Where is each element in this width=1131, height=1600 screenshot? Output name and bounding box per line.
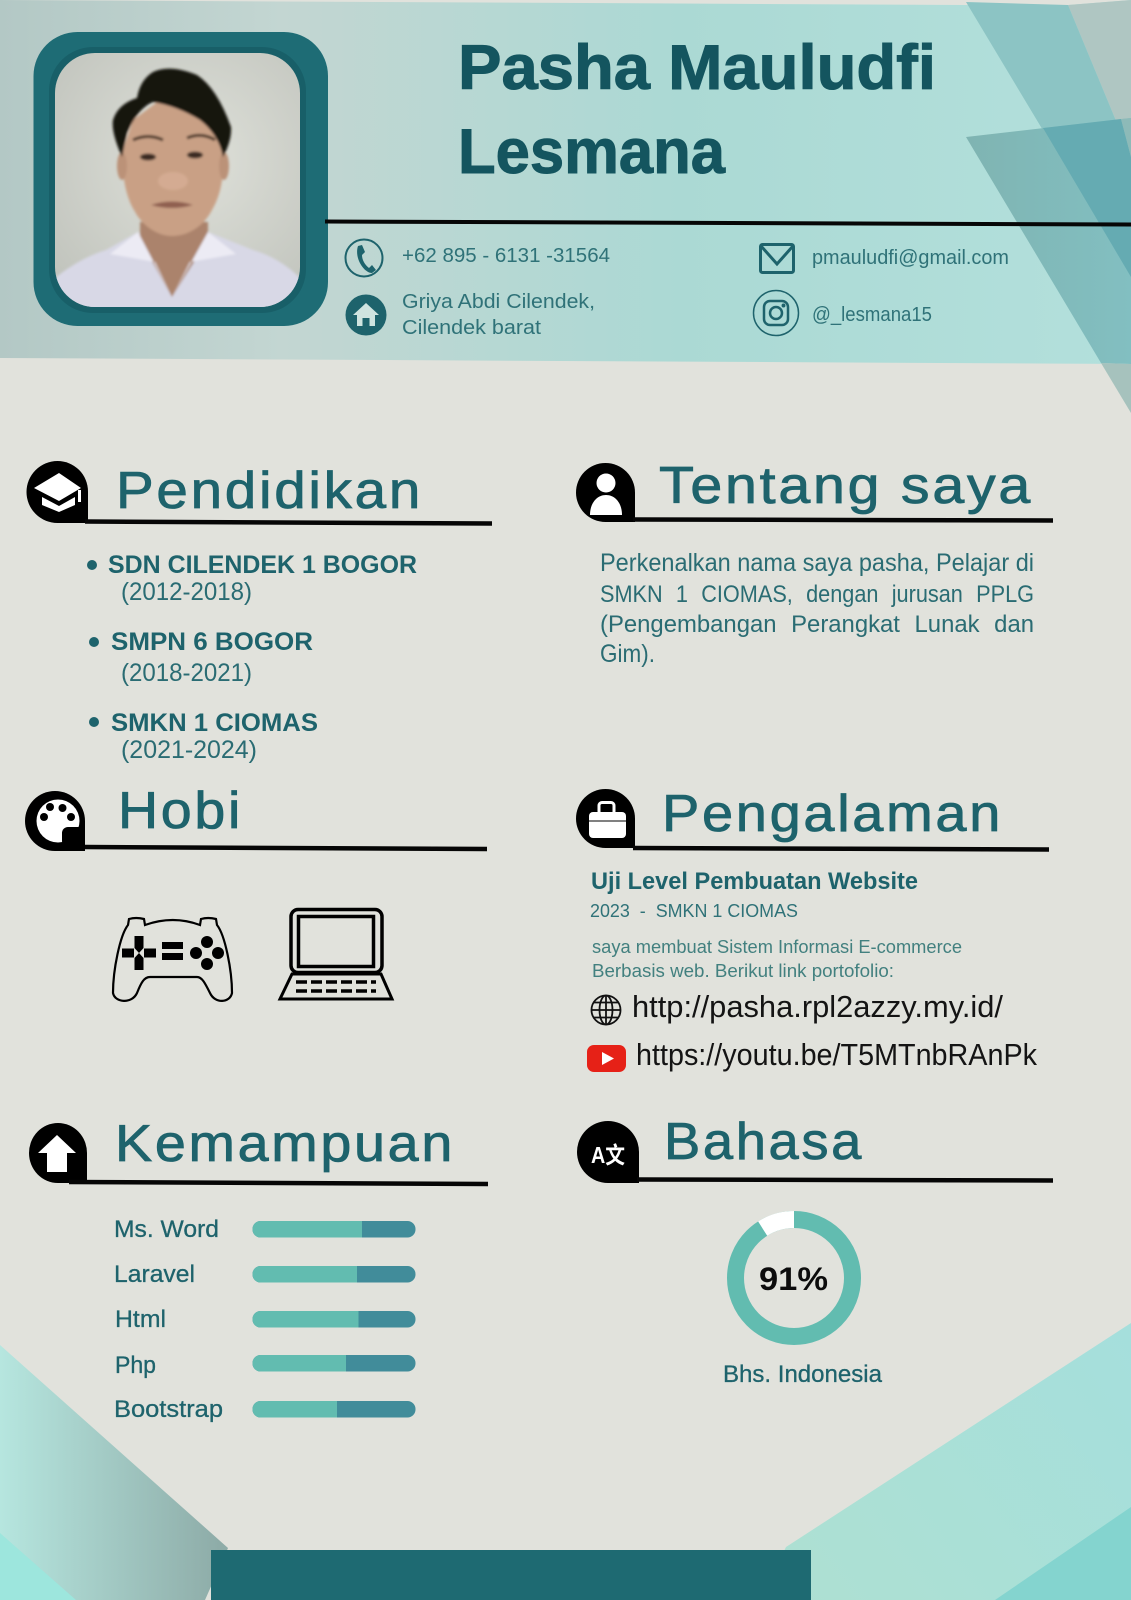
portrait photo — [55, 53, 300, 310]
about paragraph: Perkenalkan nama saya pasha, Pelajar di — [600, 549, 1034, 577]
education list: (2021-2024) — [121, 736, 257, 764]
education list — [87, 551, 417, 764]
skill: laravel — [114, 1261, 416, 1288]
education list: SMKN 1 CIOMAS — [111, 709, 318, 737]
skill: bootstrap: Bootstrap — [114, 1396, 223, 1423]
experience title: Uji Level Pembuatan Website — [591, 868, 918, 895]
address — [402, 291, 595, 339]
donut chart — [736, 1211, 852, 1336]
instagram handle: @_lesmana15 — [812, 304, 932, 326]
heading: Kemampuan — [115, 1115, 455, 1173]
skill: ms word: Ms. Word — [114, 1216, 219, 1243]
icon: phone — [346, 240, 382, 276]
icon: person — [576, 463, 635, 522]
header band — [0, 0, 1131, 413]
heading: Pendidikan — [116, 462, 423, 520]
icon: translate: A文 — [591, 1142, 625, 1168]
about paragraph: SMKN 1 CIOMAS, dengan jurusan PPLG — [600, 581, 1034, 608]
email: pmauludfi@gmail.com — [812, 247, 1009, 269]
heading: Hobi — [118, 782, 243, 840]
heading: Bahasa — [664, 1113, 864, 1171]
footer bar — [211, 1550, 811, 1600]
language label: Bhs. Indonesia — [723, 1361, 883, 1388]
heading: Tentang saya — [659, 457, 1033, 515]
icon: briefcase — [576, 789, 635, 848]
experience description: Berbasis web. Berikut link portofolio: — [592, 960, 894, 981]
experience date and school: 2023 - SMKN 1 CIOMAS — [590, 901, 798, 921]
heading: Pengalaman — [662, 785, 1003, 843]
portfolio link: http://pasha.rpl2azzy.my.id/ — [632, 989, 1003, 1024]
skill: ms word — [114, 1216, 416, 1243]
education list: SDN CILENDEK 1 BOGOR — [108, 551, 417, 579]
education list: (2012-2018) — [121, 578, 252, 606]
skill: laravel: Laravel — [114, 1261, 195, 1288]
panel: bahasa — [577, 1113, 1053, 1388]
icon: youtube — [587, 1045, 626, 1072]
decorative corner: bottom left — [0, 1345, 228, 1600]
skill: html — [115, 1306, 416, 1333]
percentage value: 91% — [759, 1261, 828, 1297]
education list: SMPN 6 BOGOR — [111, 628, 313, 656]
icon: instagram — [754, 290, 798, 336]
photo frame — [34, 32, 328, 326]
icon: laptop — [280, 910, 392, 999]
experience description — [592, 936, 962, 981]
header divider line — [325, 222, 1131, 224]
icon: home — [346, 294, 386, 336]
name title — [458, 33, 936, 187]
icon: game controller — [113, 918, 232, 1001]
skill: html: Html — [115, 1306, 166, 1333]
panel: pendidikan — [26, 461, 492, 764]
skill: php: Php — [115, 1352, 156, 1379]
address: Griya Abdi Cilendek, — [402, 291, 595, 313]
youtube link: https://youtu.be/T5MTnbRAnPk — [636, 1037, 1037, 1072]
panel: kemampuan — [29, 1115, 488, 1423]
panel: pengalaman — [576, 785, 1049, 1072]
panel: tentang saya — [576, 457, 1053, 668]
about paragraph: (Pengembangan Perangkat Lunak dan — [600, 611, 1034, 638]
decorative corner: bottom right — [760, 1323, 1131, 1600]
phone number: +62 895 - 6131 -31564 — [402, 245, 610, 267]
about paragraph: Gim). — [600, 640, 655, 668]
skill: bootstrap — [114, 1396, 416, 1423]
icon: graduation cap — [26, 461, 88, 523]
education list: (2018-2021) — [121, 659, 252, 687]
address: Cilendek barat — [402, 317, 541, 339]
icon: arrow up — [29, 1123, 87, 1183]
about paragraph — [600, 549, 1034, 668]
skill: php — [115, 1352, 416, 1379]
experience description: saya membuat Sistem Informasi E-commerce — [592, 936, 962, 957]
name title: Lesmana — [458, 117, 726, 187]
icon: palette — [25, 791, 85, 851]
icon: mail — [760, 244, 794, 272]
icon: globe — [592, 996, 620, 1024]
icon: translate — [577, 1121, 639, 1183]
panel: hobi — [25, 782, 487, 1001]
name title: Pasha Mauludfi — [458, 33, 936, 103]
